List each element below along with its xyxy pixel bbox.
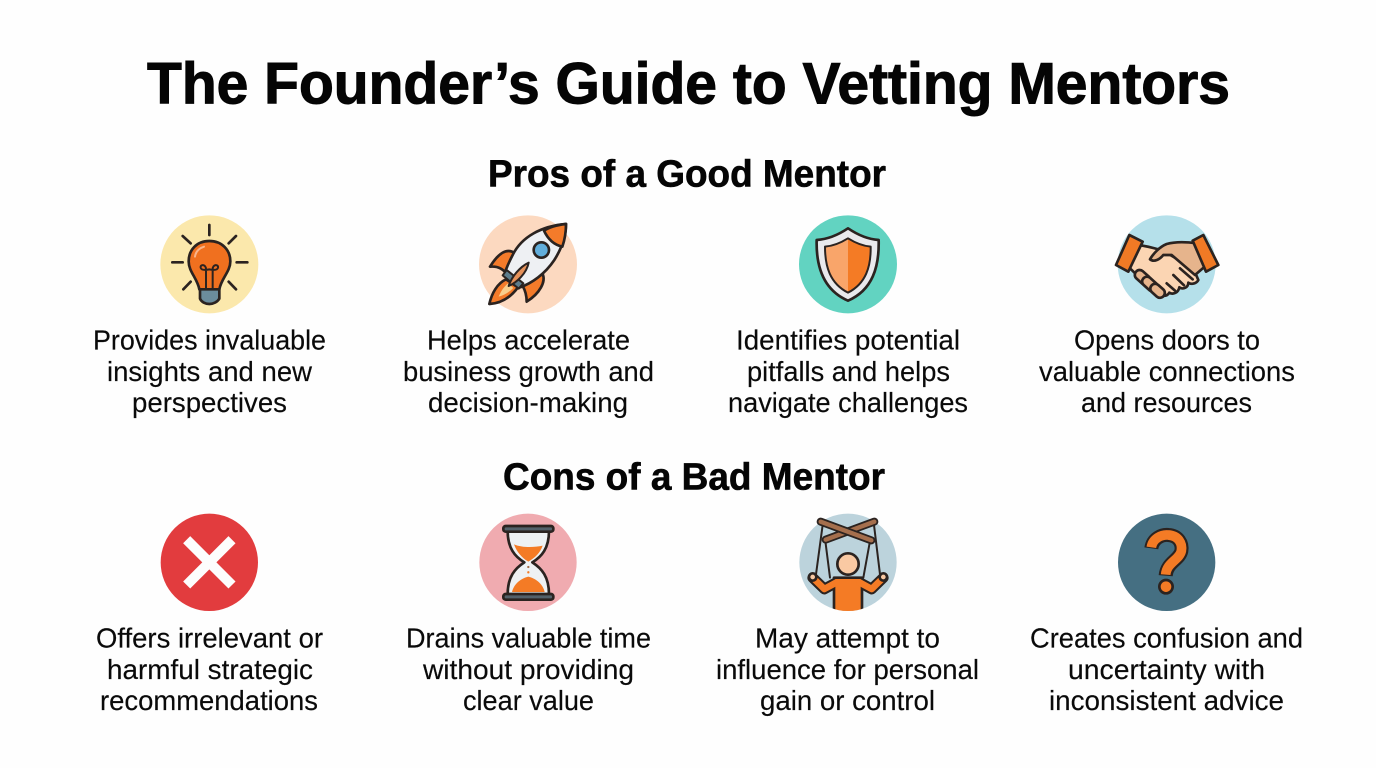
description: navigate challenges	[728, 387, 968, 418]
description: valuable connections	[1039, 356, 1295, 387]
description: clear value	[463, 685, 594, 716]
panel: pro acceleration	[403, 215, 654, 418]
description: Creates confusion and	[1030, 622, 1303, 654]
description: uncertainty with	[1068, 654, 1265, 685]
description: recommendations	[100, 685, 318, 716]
description: harmful strategic	[107, 654, 313, 685]
icon: light bulb	[160, 215, 258, 313]
icon: shield	[799, 215, 897, 313]
description: Provides invaluable	[93, 324, 326, 356]
heading: pros of a good mentor: Pros of a Good Mentor	[488, 154, 886, 196]
panel: con confusion	[1030, 514, 1303, 716]
panel: pro insights	[93, 215, 326, 418]
description: decision-making	[428, 387, 628, 418]
icon: rocket	[479, 215, 577, 313]
description	[403, 324, 654, 418]
description	[728, 324, 968, 418]
description	[1039, 324, 1295, 418]
description: insights and new	[107, 356, 312, 387]
panel: con manipulation	[716, 514, 979, 716]
description: without providing	[422, 654, 634, 685]
panel: con irrelevant advice	[96, 514, 323, 716]
description	[716, 622, 979, 716]
panel: con wasted time	[406, 514, 651, 716]
description: and resources	[1081, 387, 1252, 418]
description: May attempt to	[755, 622, 940, 654]
description: Helps accelerate	[427, 324, 630, 356]
icon: question mark	[1118, 514, 1215, 611]
description: Drains valuable time	[406, 622, 651, 654]
icon: red cross	[161, 514, 258, 611]
panel: pro pitfalls	[728, 215, 968, 418]
description: influence for personal	[716, 654, 979, 685]
title: The Founder’s Guide to Vetting Mentors	[147, 52, 1230, 116]
icon: puppet	[799, 514, 897, 615]
description: inconsistent advice	[1049, 685, 1284, 716]
description: business growth and	[403, 356, 654, 387]
description	[93, 324, 326, 418]
description	[1030, 622, 1303, 716]
description: pitfalls and helps	[747, 356, 950, 387]
icon: handshake	[1116, 215, 1218, 313]
description: Opens doors to	[1074, 324, 1260, 356]
icon: hourglass	[479, 514, 577, 611]
description	[96, 622, 323, 716]
panel: pro connections	[1039, 215, 1295, 418]
description: Offers irrelevant or	[96, 622, 323, 654]
heading: cons of a bad mentor: Cons of a Bad Mentor	[503, 456, 885, 498]
description: Identifies potential	[736, 324, 960, 356]
description	[406, 622, 651, 716]
description: perspectives	[132, 387, 287, 418]
description: gain or control	[760, 685, 935, 716]
